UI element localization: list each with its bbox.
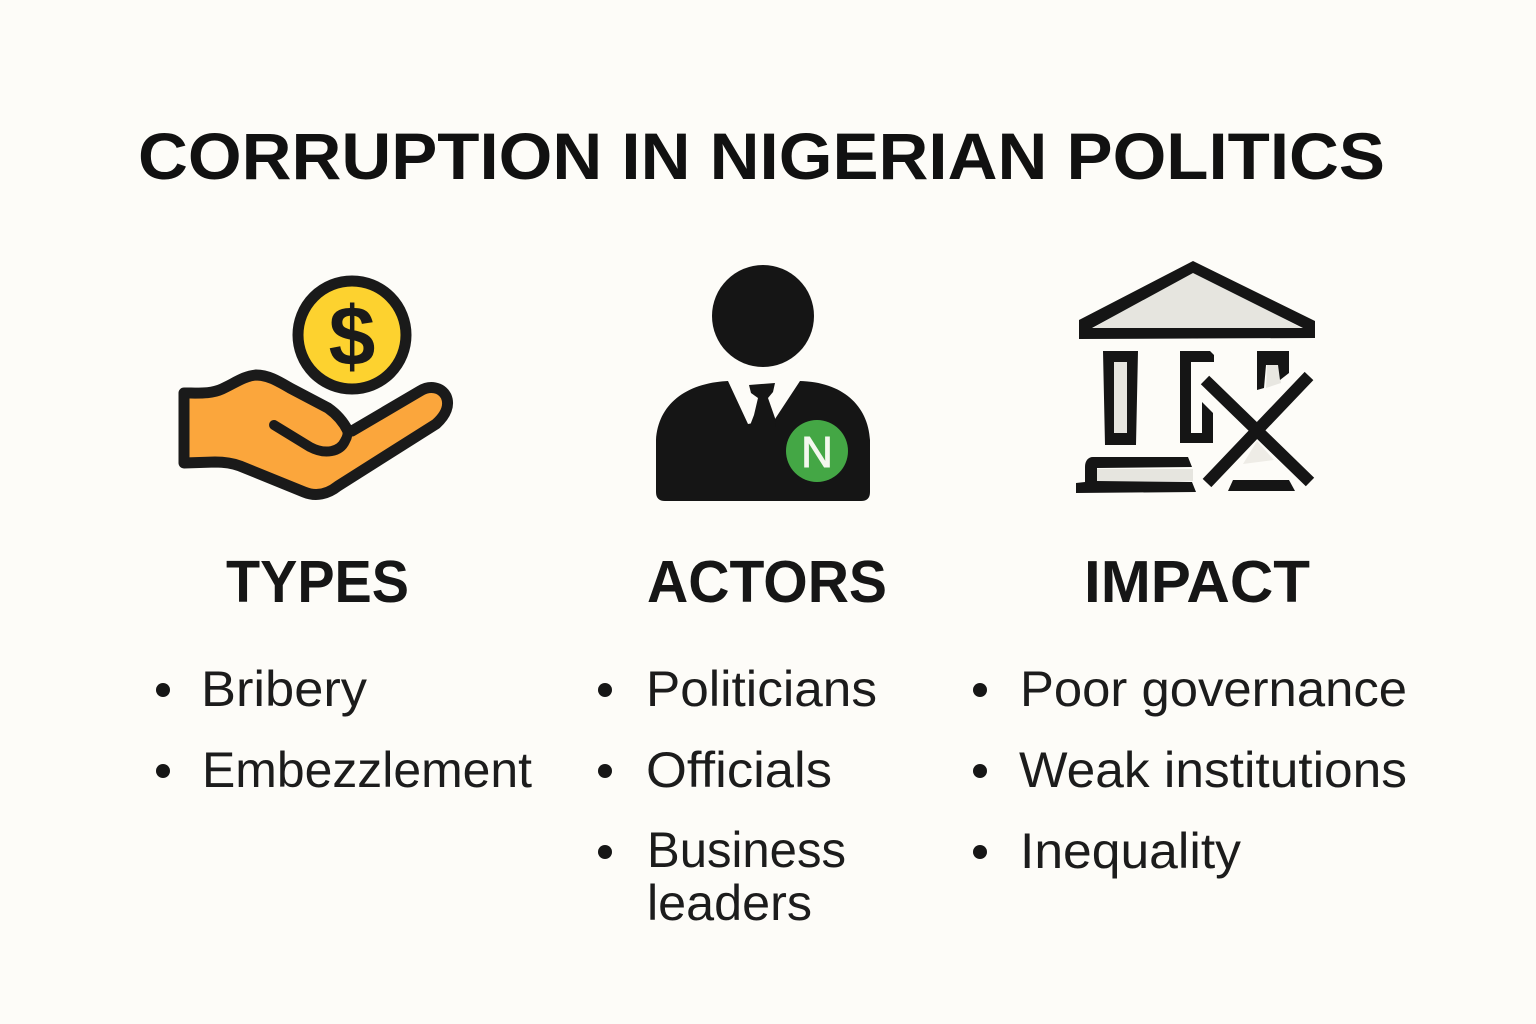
heading: types: TYPES [226,549,409,615]
list: impact: Poor governance [1020,661,1407,717]
list: types: Embezzlement [202,742,532,798]
icon: crossed-out institution building [1076,261,1315,493]
list: impact: Weak institutions [1019,742,1407,798]
list: actors: Politicians [646,661,877,717]
icon: hand holding dollar coin [184,281,448,494]
heading: actors: ACTORS [647,549,887,615]
panel: impact [973,261,1407,879]
icon: official silhouette with N badge [656,265,870,501]
panel: actors [598,265,887,931]
list: actors: leaders [647,875,812,931]
list: impact: Inequality [1020,823,1241,879]
list: actors [598,661,877,931]
list: impact [973,661,1407,879]
icon: official silhouette with N badge: N [801,428,833,477]
title: CORRUPTION IN NIGERIAN POLITICS [138,119,1385,193]
panel: types [156,281,532,798]
list: actors: Officials [646,742,832,798]
list: types [156,661,532,798]
list: actors: Business [647,822,846,878]
heading: impact: IMPACT [1084,549,1310,615]
list: types: Bribery [201,661,367,717]
icon: hand holding dollar coin: $ [329,289,375,383]
